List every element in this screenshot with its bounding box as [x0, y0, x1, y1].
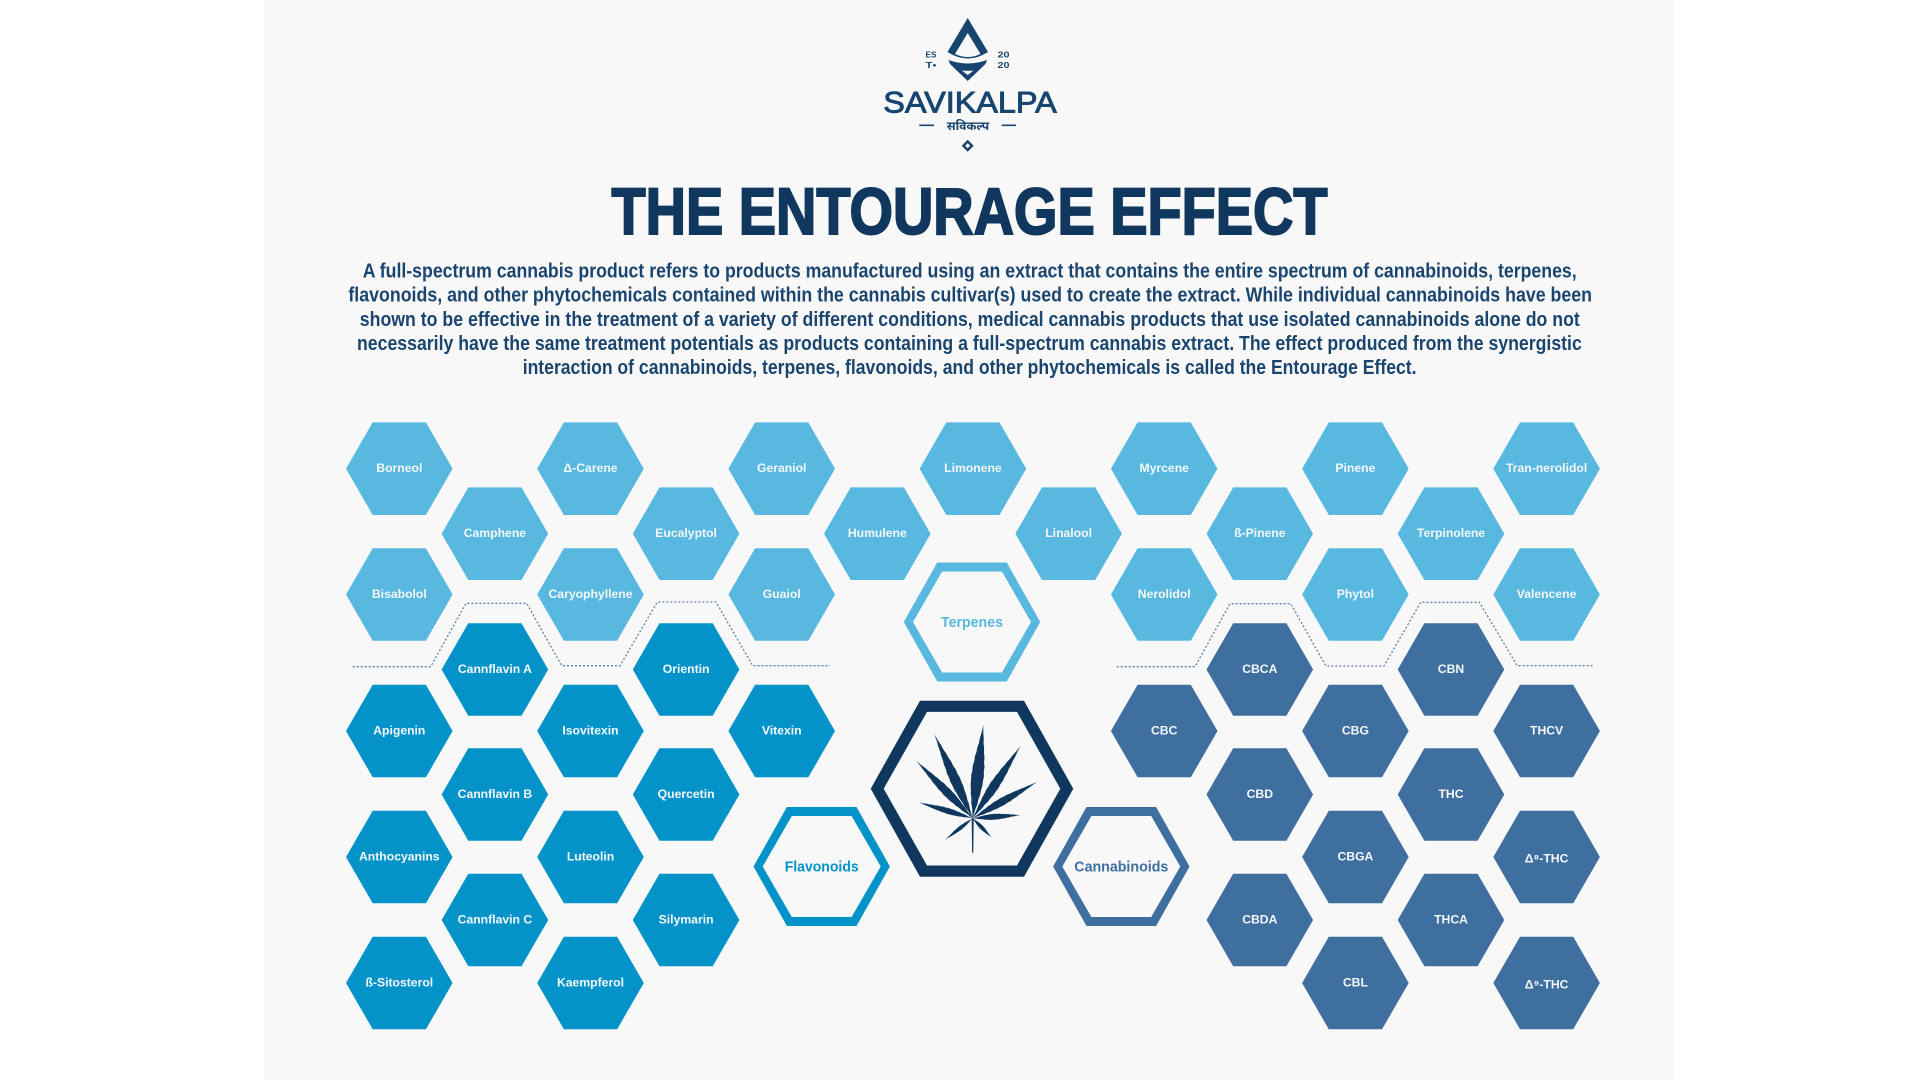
- hexagon: Δ8-THC: Δ⁸-THC: [1525, 852, 1569, 866]
- text block: intro paragraph: flavonoids, and other phytochemicals contained within the cannabis cultivar(s) used to create the extract. While individual cannabinoids have been: [348, 285, 1592, 307]
- outlined hexagon: Cannabinoids: [1053, 807, 1190, 926]
- group: terpene hexagons: [346, 422, 1600, 641]
- hexagon: Terpinolene: [1398, 487, 1504, 580]
- hexagon: Δ-Carene: Δ-Carene: [563, 461, 618, 475]
- hexagon: THCV: [1493, 685, 1600, 777]
- hexagon: Silymarin: Silymarin: [659, 912, 714, 926]
- hexagon: CBC: CBC: [1151, 723, 1178, 737]
- hexagon: Eucalyptol: [633, 487, 739, 580]
- hexagon: Phytol: [1302, 548, 1409, 641]
- icon: logo small diamond: [962, 140, 974, 152]
- hexagon: Anthocyanins: [346, 811, 453, 903]
- hexagon: Borneol: [346, 422, 453, 515]
- hexagon: Nerolidol: Nerolidol: [1138, 587, 1191, 601]
- hexagon: Camphene: Camphene: [464, 526, 526, 540]
- icon: cannabis leaf: [913, 724, 1039, 853]
- hexagon: Caryophyllene: [537, 548, 644, 641]
- text block: intro paragraph: [348, 260, 1592, 379]
- logo year right: 20: [998, 60, 1010, 70]
- hexagon: CBDA: CBDA: [1242, 912, 1278, 926]
- hexagon: Cannflavin C: [442, 874, 548, 966]
- hexagon: CBD: CBD: [1247, 787, 1273, 801]
- hexagon: CBGA: CBGA: [1337, 849, 1374, 863]
- hexagon: Linalool: Linalool: [1045, 526, 1092, 540]
- hexagon: Tran-nerolidol: Tran-nerolidol: [1506, 461, 1587, 475]
- group: flavonoid hexagons: [346, 623, 835, 1029]
- logo dashes: [919, 124, 1016, 126]
- hexagon: THCV: THCV: [1530, 723, 1564, 737]
- hexagon: Cannflavin A: [442, 623, 548, 716]
- hexagon: Nerolidol: [1111, 548, 1218, 641]
- logo Hindi text: सविकल्प: [947, 118, 990, 133]
- logo year left: [926, 50, 937, 70]
- hexagon: CBG: [1302, 685, 1409, 777]
- hexagon: CBCA: CBCA: [1242, 662, 1278, 676]
- text block: intro paragraph: shown to be effective in the treatment of a variety of different conditions, medical cannabis products that use isolated cannabinoids alone do not: [360, 309, 1580, 331]
- hexagon: CBL: [1302, 937, 1409, 1029]
- hexagon: ß-Sitosterol: [346, 937, 453, 1029]
- outlined hexagon: Flavonoids: [754, 807, 890, 926]
- title: THE ENTOURAGE EFFECT: [612, 174, 1328, 248]
- hexagon: Orientin: [633, 623, 739, 716]
- hexagon: Kaempferol: [537, 937, 644, 1029]
- hexagon: Δ-Carene: [537, 422, 644, 515]
- outlined hexagon: Terpenes: Terpenes: [941, 614, 1003, 631]
- hexagon: Quercetin: [633, 748, 739, 841]
- hexagon: Vitexin: Vitexin: [762, 723, 802, 737]
- hexagon: Isovitexin: [537, 685, 644, 777]
- hexagon: Guaiol: Guaiol: [763, 587, 801, 601]
- hexagon: Borneol: Borneol: [376, 461, 422, 475]
- hexagon: CBD: [1206, 748, 1313, 841]
- group: cannabinoid hexagons: [1111, 623, 1600, 1029]
- hexagon: Cannflavin B: Cannflavin B: [458, 787, 532, 801]
- logo wordmark: SAVIKALPA: [883, 87, 1057, 120]
- outlined hexagon: Terpenes: [904, 562, 1040, 682]
- hexagon: CBN: CBN: [1438, 662, 1464, 676]
- panel: background: [265, 0, 1675, 1080]
- hexagon: Pinene: Pinene: [1335, 461, 1376, 475]
- hexagon: Δ8-THC: [1493, 811, 1600, 903]
- hexagon: CBGA: [1302, 811, 1409, 903]
- hexagon: Limonene: Limonene: [944, 461, 1002, 475]
- hexagon: Luteolin: [537, 811, 644, 903]
- outlined hexagon: Flavonoids: Flavonoids: [785, 858, 859, 876]
- hexagon: CBG: CBG: [1342, 723, 1369, 737]
- hexagon: Bisabolol: Bisabolol: [372, 587, 427, 601]
- hexagon: THC: THC: [1438, 787, 1464, 801]
- hexagon: ß-Pinene: [1206, 487, 1313, 580]
- hexagon: CBL: CBL: [1343, 975, 1368, 989]
- hexagon: ß-Sitosterol: ß-Sitosterol: [365, 975, 433, 989]
- hexagon: CBDA: [1206, 874, 1313, 966]
- hexagon: CBN: [1398, 623, 1504, 716]
- hexagon: Silymarin: [633, 874, 739, 966]
- hexagon: Δ9-THC: Δ⁹-THC: [1525, 978, 1569, 992]
- hexagon: Myrcene: Myrcene: [1139, 461, 1189, 475]
- hexagon: CBC: [1111, 685, 1218, 777]
- icon: logo drop emblem: [948, 18, 988, 81]
- hexagon: Kaempferol: Kaempferol: [557, 975, 624, 989]
- hexagon: Geraniol: Geraniol: [757, 461, 806, 475]
- hexagon: Tran-nerolidol: [1493, 422, 1600, 515]
- hexagon: Linalool: [1015, 487, 1122, 580]
- hexagon: CBCA: [1206, 623, 1313, 716]
- hexagon: Valencene: Valencene: [1517, 587, 1577, 601]
- hexagon: Apigenin: [346, 685, 453, 777]
- hexagon: Cannflavin A: Cannflavin A: [458, 662, 532, 676]
- hexagon: Isovitexin: Isovitexin: [562, 723, 619, 737]
- hexagon: THCA: THCA: [1434, 912, 1468, 926]
- logo: Savikalpa: [883, 18, 1057, 152]
- text block: intro paragraph: interaction of cannabinoids, terpenes, flavonoids, and other phytochemicals is called the Entourage Effect.: [523, 357, 1416, 379]
- hexagon: Humulene: Humulene: [848, 526, 907, 540]
- hexagon: Geraniol: [728, 422, 835, 515]
- hexagon: Terpinolene: Terpinolene: [1417, 526, 1485, 540]
- hexagon: Bisabolol: [346, 548, 453, 641]
- center hexagon with cannabis leaf: [871, 701, 1073, 877]
- hexagon: Cannflavin B: [442, 748, 548, 841]
- hexagon: Valencene: [1493, 548, 1600, 641]
- hexagon: Anthocyanins: Anthocyanins: [359, 849, 440, 863]
- text block: intro paragraph: necessarily have the same treatment potentials as products containing a full-spectrum cannabis extract. The effect produced from the synergistic: [357, 333, 1582, 355]
- hexagon: Phytol: Phytol: [1337, 587, 1374, 601]
- hexagon: Luteolin: Luteolin: [567, 849, 614, 863]
- hexagon: Limonene: [920, 422, 1026, 515]
- hexagon: Guaiol: [728, 548, 835, 641]
- hexagon: ß-Pinene: ß-Pinene: [1234, 526, 1286, 540]
- outlined hexagon: Cannabinoids: Cannabinoids: [1074, 858, 1168, 876]
- hexagon: Caryophyllene: Caryophyllene: [548, 587, 633, 601]
- hexagon: Humulene: [824, 487, 931, 580]
- logo year right: 20: [998, 50, 1010, 60]
- hexagon: Δ9-THC: [1493, 937, 1600, 1029]
- logo year right: [998, 50, 1010, 70]
- hexagon: Vitexin: [728, 685, 835, 777]
- hexagon: Cannflavin C: Cannflavin C: [458, 912, 532, 926]
- hexagon: Orientin: Orientin: [663, 662, 709, 676]
- hexagon: THCA: [1398, 874, 1504, 966]
- logo year left: T•: [926, 60, 937, 70]
- hexagon: Quercetin: Quercetin: [658, 787, 715, 801]
- hexagon: Pinene: [1302, 422, 1409, 515]
- hexagon: Apigenin: Apigenin: [373, 723, 425, 737]
- text block: intro paragraph: A full-spectrum cannabis product refers to products manufactured using an extract that contains the entire spectrum of cannabinoids, terpenes,: [363, 260, 1577, 282]
- logo year left: ES: [926, 50, 937, 60]
- hexagon: THC: [1398, 748, 1504, 841]
- hexagon: Camphene: [442, 487, 548, 580]
- hexagon: Myrcene: [1111, 422, 1218, 515]
- hexagon: Eucalyptol: Eucalyptol: [655, 526, 717, 540]
